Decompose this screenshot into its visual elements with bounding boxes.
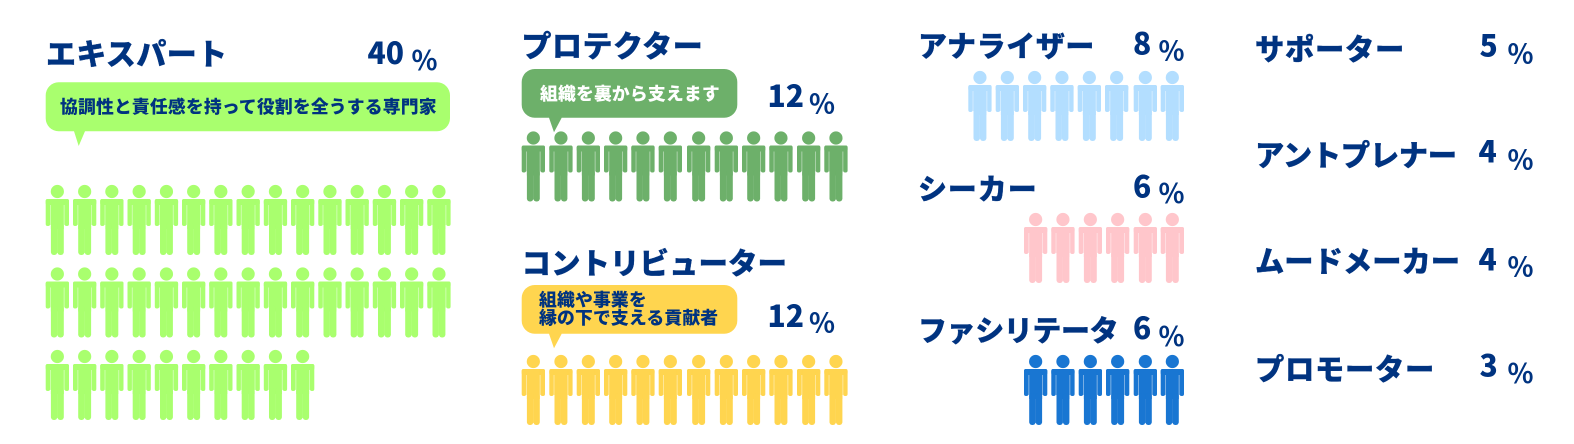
heading: contributor: コントリビューター xyxy=(522,247,787,281)
percentage: 8%: 8 xyxy=(1133,20,1151,64)
percentage: 6% xyxy=(1133,162,1185,211)
row: mood maker 4%: ムードメーカー xyxy=(1255,246,1460,279)
heading: protector: プロテクター xyxy=(522,31,703,64)
percentage: 40% xyxy=(368,29,438,78)
callout: contributor description: 縁の下で支える貢献者 xyxy=(539,307,718,328)
percentage: 6%: % xyxy=(1158,315,1185,354)
percentage: 6%: 6 xyxy=(1133,304,1151,348)
panel: facilitator 6% xyxy=(918,304,1185,425)
percentage: 12%: 12 xyxy=(768,72,804,116)
heading: facilitator: ファシリテータ xyxy=(918,315,1118,348)
heading: seeker: シーカー xyxy=(918,174,1038,206)
row: entrepreneur 4%: % xyxy=(1508,138,1534,178)
row: mood maker 4% xyxy=(1255,236,1534,284)
row: entrepreneur 4%: アントプレナー xyxy=(1255,140,1457,173)
percentage: 40%: % xyxy=(412,39,438,78)
pictogram: 12 green people xyxy=(522,131,848,202)
row: supporter 5% xyxy=(1255,22,1534,72)
panel: expert 40% xyxy=(46,29,451,420)
row: mood maker 4%: 4 xyxy=(1478,236,1497,280)
callout: expert description: 協調性と責任感を持って役割を全うする専門家 xyxy=(60,96,437,117)
row: entrepreneur 4% xyxy=(1255,128,1534,178)
pictogram: 6 blue people xyxy=(1024,355,1184,425)
percentage: 12% xyxy=(768,72,835,122)
row: promoter 3%: 3 xyxy=(1480,342,1498,386)
percentage: 6%: % xyxy=(1158,172,1185,211)
row: promoter 3%: プロモーター xyxy=(1255,354,1435,387)
pictogram: 8 light blue people xyxy=(968,71,1184,141)
pictogram: 40 green people xyxy=(46,185,451,420)
callout: contributor description: 組織や事業を xyxy=(539,289,647,310)
callout: protector description xyxy=(522,69,737,132)
percentage: 12% xyxy=(768,292,835,340)
percentage: 12%: % xyxy=(809,302,835,340)
percentage: 6% xyxy=(1133,304,1185,354)
callout: protector description: 組織を裏から支えます xyxy=(540,83,720,104)
percentage: 6%: 6 xyxy=(1133,162,1151,206)
heading: analyzer: アナライザー xyxy=(918,32,1095,64)
row: entrepreneur 4%: 4 xyxy=(1478,128,1497,172)
row: promoter 3%: % xyxy=(1508,352,1534,391)
percentage: 12%: % xyxy=(809,82,835,122)
percentage: 40%: 40 xyxy=(368,29,404,73)
pictogram: 12 yellow people xyxy=(522,355,848,425)
callout: expert description xyxy=(46,82,450,146)
callout: contributor description xyxy=(522,285,737,348)
row: supporter 5%: 5 xyxy=(1480,22,1498,66)
percentage: 8%: % xyxy=(1158,30,1185,68)
panel: analyzer 8% xyxy=(918,20,1185,141)
row: supporter 5%: % xyxy=(1508,32,1534,72)
percentage: 12%: 12 xyxy=(768,292,804,336)
row: promoter 3% xyxy=(1255,342,1534,391)
heading: expert: エキスパート xyxy=(46,39,228,72)
percentage: 8% xyxy=(1133,20,1185,68)
panel: protector 12% xyxy=(522,31,848,202)
row: mood maker 4%: % xyxy=(1508,246,1534,284)
panel: seeker 6% xyxy=(918,162,1185,283)
row: supporter 5%: サポーター xyxy=(1255,33,1405,67)
panel: contributor 12% xyxy=(522,247,848,425)
pictogram: 6 pink people xyxy=(1024,213,1184,283)
